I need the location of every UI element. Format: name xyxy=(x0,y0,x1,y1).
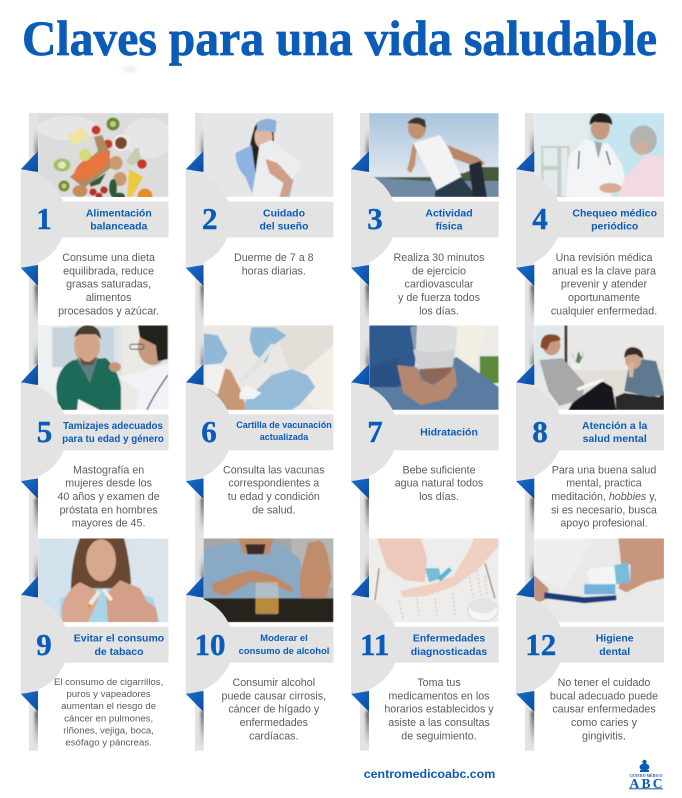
heading: de tabaco xyxy=(94,646,144,658)
description: próstata en hombres xyxy=(60,504,158,516)
description xyxy=(394,252,484,317)
heading band xyxy=(38,627,168,663)
tab triangles xyxy=(21,576,38,712)
description: Duerme de 7 a 8 xyxy=(234,252,314,264)
side strip xyxy=(195,539,204,751)
description: Mastografía en xyxy=(73,464,144,476)
number: 6 xyxy=(201,414,217,449)
description: grasas saturadas, xyxy=(66,279,151,291)
photo: therapy session xyxy=(534,325,664,410)
number: 7 xyxy=(367,414,383,449)
heading band xyxy=(38,202,168,238)
card 6: cartilla de vacunación xyxy=(186,325,334,539)
heading xyxy=(74,633,164,658)
description: si es necesario, busca xyxy=(551,504,657,516)
description: Realiza 30 minutos xyxy=(394,252,484,264)
heading: Cuidado xyxy=(263,207,305,219)
description: mujeres desde los xyxy=(65,478,152,490)
number disc xyxy=(516,382,563,481)
description: puros y vapeadores xyxy=(66,689,151,700)
description: El consumo de cigarrillos, xyxy=(54,677,163,688)
heading xyxy=(582,420,648,445)
side strip xyxy=(525,325,534,538)
card 1: alimentación balanceada xyxy=(21,113,173,325)
icon: crown emblem xyxy=(640,760,650,772)
number disc xyxy=(186,382,233,481)
photo: hands holding water xyxy=(369,325,499,410)
description xyxy=(234,252,314,277)
description: tu edad y condición xyxy=(228,491,320,503)
description: cardíacas. xyxy=(249,730,298,742)
logo name: CENTRO MÉDICO xyxy=(630,773,663,778)
heading: balanceada xyxy=(90,220,148,232)
description: bucal adecuado puede xyxy=(550,690,658,702)
tab triangles xyxy=(21,364,38,499)
description: aumentan el riesgo de xyxy=(61,701,156,712)
description: causar enfermedades xyxy=(552,704,656,716)
title: Claves para una vida saludable xyxy=(22,10,657,66)
side strip xyxy=(29,113,38,325)
description: horas diarias. xyxy=(242,265,306,277)
tab triangles xyxy=(516,364,534,499)
heading band xyxy=(204,202,334,238)
description: enfermedades xyxy=(240,717,308,729)
tab triangles xyxy=(351,364,369,499)
card 11: enfermedades diagnosticadas xyxy=(351,538,499,751)
heading: para tu edad y género xyxy=(62,434,164,445)
description xyxy=(222,677,326,742)
description: prevenir y atender xyxy=(561,279,648,291)
card 5: tamizajes xyxy=(21,325,169,539)
description: Consulta las vacunas xyxy=(223,464,325,476)
side strip xyxy=(29,325,38,538)
side strip xyxy=(525,539,534,751)
card 8: salud mental xyxy=(516,325,664,539)
tab triangles xyxy=(186,364,204,499)
description: de salud. xyxy=(252,504,295,516)
description: cardiovascular xyxy=(405,279,474,291)
card 4: chequeo médico periódico xyxy=(516,113,664,325)
logo underline xyxy=(629,788,663,789)
description: y de fuerza todos xyxy=(398,292,480,304)
description: cáncer en pulmones, xyxy=(64,713,153,724)
description: riñones, vejiga, boca, xyxy=(63,726,154,736)
heading: Actividad xyxy=(425,207,473,219)
heading: Higiene xyxy=(596,633,634,645)
description: Consume una dieta xyxy=(62,252,155,264)
description: anual es la clave para xyxy=(552,265,656,277)
description: como caries y xyxy=(571,717,638,729)
description: correspondientes a xyxy=(228,478,319,490)
heading: Tamizajes adecuados xyxy=(63,421,164,432)
number disc xyxy=(351,382,398,481)
number: 1 xyxy=(36,201,52,236)
tab triangles xyxy=(186,151,204,286)
heading xyxy=(62,421,164,445)
description: meditación, hobbies y, xyxy=(551,491,657,503)
photo: woman breaking cigarette xyxy=(38,538,168,622)
heading xyxy=(596,633,634,658)
tab triangles xyxy=(351,576,369,712)
number disc xyxy=(516,169,562,268)
description: agua natural todos xyxy=(395,478,483,490)
heading: Atención a la xyxy=(582,420,648,432)
number disc xyxy=(21,595,68,694)
card 7: hidratación xyxy=(351,324,499,539)
heading xyxy=(86,207,152,232)
side strip xyxy=(29,539,38,751)
description xyxy=(54,677,163,748)
photo: man stretching xyxy=(369,113,499,197)
heading: física xyxy=(436,220,463,232)
photo: man refusing alcohol xyxy=(204,538,334,622)
description: gingivitis. xyxy=(582,730,626,742)
heading band xyxy=(534,627,664,663)
logo letters: ABC xyxy=(630,776,662,791)
description: equilibrada, reduce xyxy=(63,265,154,277)
photo: woman hugging pillow xyxy=(204,113,334,197)
description: asiste a las consultas xyxy=(388,717,490,729)
description xyxy=(395,464,483,503)
description: mental, practica xyxy=(566,478,642,490)
website url: centromedicoabc.com xyxy=(364,767,495,781)
description: los días. xyxy=(419,491,459,503)
number: 3 xyxy=(367,201,383,236)
tab triangles xyxy=(21,151,38,286)
heading: salud mental xyxy=(583,433,647,445)
heading: Hidratación xyxy=(420,426,478,438)
number: 11 xyxy=(360,627,389,662)
number: 4 xyxy=(532,201,548,236)
photo: doctor with patient xyxy=(534,113,664,197)
number disc xyxy=(351,595,399,694)
description: medicamentos en los xyxy=(388,690,490,702)
number disc xyxy=(516,595,564,694)
heading band xyxy=(534,202,664,238)
description: Para una buena salud xyxy=(552,464,656,476)
description: esófago y páncreas. xyxy=(65,738,152,748)
heading band xyxy=(369,627,499,663)
heading: Alimentación xyxy=(86,207,152,219)
side strip xyxy=(195,325,204,538)
side strip xyxy=(360,325,369,538)
side strip xyxy=(360,113,369,325)
description: horarios establecidos y xyxy=(384,704,494,716)
card 2: cuidado del sueño xyxy=(186,113,334,325)
heading band xyxy=(38,414,168,450)
number: 5 xyxy=(37,414,52,449)
tab triangles xyxy=(186,576,204,712)
heading: consumo de alcohol xyxy=(239,645,329,656)
description: cáncer de hígado y xyxy=(228,704,320,716)
description: Consumir alcohol xyxy=(233,677,315,689)
photo: vaccine injection xyxy=(204,325,334,410)
heading: Enfermedades xyxy=(413,633,485,645)
heading: del sueño xyxy=(259,220,309,232)
number disc xyxy=(351,169,397,268)
card 9: evitar tabaco xyxy=(21,538,169,751)
description xyxy=(551,252,657,317)
description: puede causar cirrosis, xyxy=(222,690,326,702)
number: 10 xyxy=(194,627,226,662)
description: apoyo profesional. xyxy=(560,518,648,530)
description: Una revisión médica xyxy=(556,252,652,264)
description xyxy=(58,252,159,317)
description xyxy=(551,464,657,530)
heading band xyxy=(204,414,334,450)
description: 40 años y examen de xyxy=(57,491,160,503)
description: de ejercicio xyxy=(412,265,466,277)
tab triangles xyxy=(516,151,534,286)
heading: diagnosticadas xyxy=(411,646,487,658)
description: procesados y azúcar. xyxy=(58,305,159,317)
heading: Moderar el xyxy=(260,632,308,643)
heading band xyxy=(369,202,499,238)
number disc xyxy=(21,169,66,268)
number disc xyxy=(21,382,68,481)
heading xyxy=(411,633,487,658)
number: 8 xyxy=(532,414,548,449)
description xyxy=(223,464,325,516)
card 12: higiene dental xyxy=(516,538,664,751)
description: los días. xyxy=(419,305,459,317)
photo: healthy food xyxy=(38,113,168,197)
description: No tener el cuidado xyxy=(558,677,650,689)
description: Toma tus xyxy=(417,677,461,689)
photo: doctor and man xyxy=(38,325,168,410)
description: cualquier enfermedad. xyxy=(551,305,657,317)
description: oportunamente xyxy=(568,292,640,304)
heading band xyxy=(534,414,664,450)
heading band xyxy=(204,627,334,663)
heading xyxy=(239,632,329,656)
side strip xyxy=(360,539,369,751)
heading: Chequeo médico xyxy=(572,207,657,219)
number disc xyxy=(186,169,231,268)
tab triangles xyxy=(351,151,369,286)
number: 9 xyxy=(36,627,52,662)
heading xyxy=(236,420,332,442)
card 3: actividad física xyxy=(351,113,499,325)
description: de seguimiento. xyxy=(401,730,477,742)
description xyxy=(550,677,658,742)
description xyxy=(384,677,494,742)
photo: hands with medication xyxy=(369,538,499,622)
heading: Cartilla de vacunación xyxy=(236,420,332,430)
heading: Evitar el consumo xyxy=(74,633,164,645)
heading band xyxy=(369,414,499,450)
description: alimentos xyxy=(86,292,131,304)
heading xyxy=(259,207,309,232)
side strip xyxy=(525,113,534,325)
number: 12 xyxy=(525,627,556,662)
description: Bebe suficiente xyxy=(402,464,476,476)
heading xyxy=(425,207,473,232)
description: mayores de 45. xyxy=(72,518,145,530)
number: 2 xyxy=(202,201,217,236)
side strip xyxy=(195,113,204,325)
heading: dental xyxy=(599,646,630,658)
number disc xyxy=(186,595,233,694)
tab triangles xyxy=(516,576,534,712)
description xyxy=(57,464,160,530)
heading: actualizada xyxy=(260,432,309,442)
heading xyxy=(572,207,657,232)
logo: Centro Médico ABC xyxy=(629,760,663,791)
heading: periódico xyxy=(591,220,638,232)
photo: toothbrush and toothpaste xyxy=(534,538,664,622)
card 10: moderar alcohol xyxy=(186,538,334,751)
